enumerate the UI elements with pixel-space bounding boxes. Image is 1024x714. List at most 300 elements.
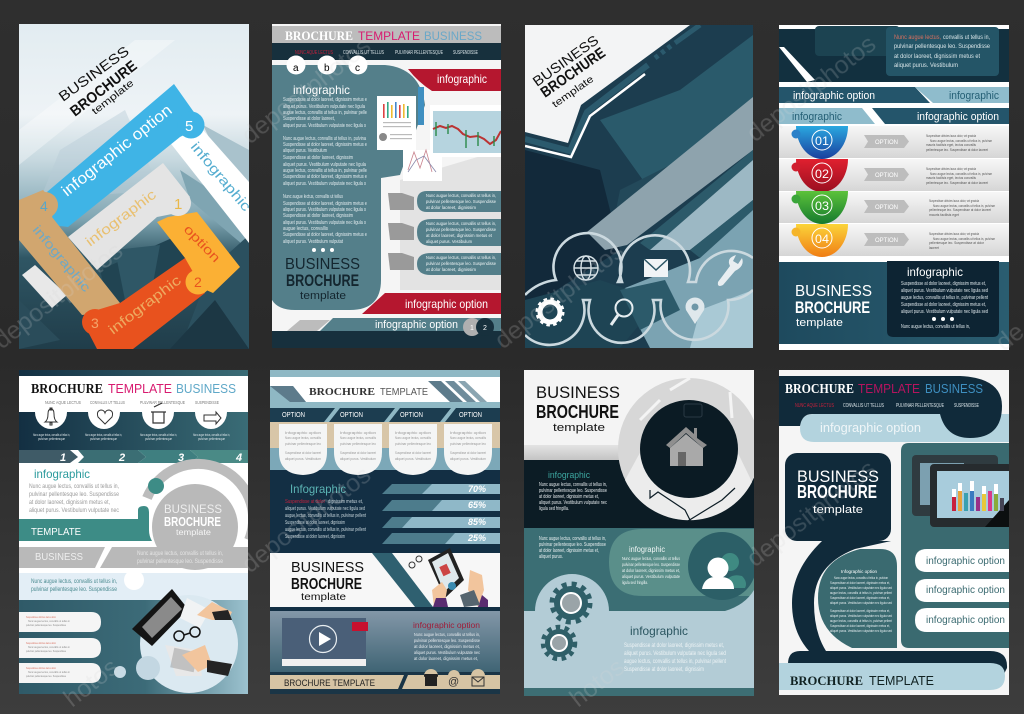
header title and nav: TEMPLATE [108, 381, 172, 396]
option row 03: Suspendisse ultricies lacus dolor, vel gravida [929, 199, 979, 203]
band: yellow option: option [181, 222, 224, 265]
text block: infographic: augue lectus, convallis ut tellus in, pulvinar pellent [285, 513, 366, 519]
footer panel with title and text box: BROCHURE [795, 298, 870, 317]
icon: map pin [686, 297, 704, 324]
dark title box [785, 453, 891, 541]
text block: infographic: dignissim metus et, [328, 499, 363, 505]
text block: infographic on light blue [624, 624, 726, 673]
option cards: aliquet purus. Vestibulum [285, 457, 321, 461]
option row 04: OPTION [875, 238, 898, 244]
folder icons and pills: Nunc augue lectus, convallis ut tellus in, [426, 221, 496, 226]
option cards: Suspendisse at dolor laoreet [395, 451, 431, 455]
option row 03: Nunc augue lectus, convallis ut tellus in, pulvinar [933, 204, 996, 208]
abc tabs: c [355, 63, 360, 74]
panel: brochure 8, tablets and pills [779, 370, 1012, 695]
grey ring with title: BROCHURE [164, 514, 221, 529]
text block [283, 83, 367, 245]
folder icons and pills: pulvinar pellentesque leo. Suspendisse [426, 227, 496, 232]
title: BROCHURE [286, 271, 359, 290]
white title wedge and teal stripes: template [301, 592, 347, 603]
folder icons and pills: at dolor laoreet, dignissim [426, 205, 476, 210]
footer strip: 1 [470, 325, 474, 332]
text block: infographic: pulvinar pellentesque leo. Suspendisse [29, 492, 120, 498]
step chevrons: 1 [60, 452, 66, 464]
option cards: Suspendisse at dolor laoreet [285, 451, 321, 455]
title: BUSINESS [529, 32, 601, 89]
footer pill: TEMPLATE [869, 673, 934, 688]
text block: infographic on light blue: augue lectus, convallis ut tellus in, pulvinar pellent [624, 659, 726, 665]
option cards: aliquet purus. Vestibulum [395, 457, 431, 461]
band: tan infographic: infographic [30, 222, 94, 295]
ribbon row 1 [779, 87, 1009, 103]
text block: augue lectus, convallis [283, 226, 328, 232]
option row 02: 02 [815, 167, 829, 181]
band: orange infographic: 3 [91, 315, 99, 331]
grey business bands: BUSINESS [35, 552, 83, 563]
band: small white strip [22, 265, 67, 308]
option row 02: pellentesque leo. Suspendisse at dolor laoreet [926, 181, 988, 185]
option cards: Nunc augue lectus, convallis [450, 436, 486, 440]
icon: large gear [552, 584, 590, 622]
text block: aliquet purus. Vestibulum vulputate nec ligula s [283, 207, 366, 213]
watermark text: depositphotos [236, 32, 376, 150]
watermark text: depositphotos [741, 455, 881, 573]
text block: infographic: aliquet purus. Vestibulum vulputate nec [29, 508, 119, 514]
dark header with text box: convallis ut tellus in, [943, 34, 990, 41]
option row 01: 01 [815, 134, 829, 148]
folder icons and pills: at dolor laoreet, dignissim metus et [426, 233, 493, 238]
teal inner text shape: aliquet purus. Vestibulum vulputate nec ligula sed [830, 586, 892, 590]
text block: aliquet purus. Vestibulum vulputat [283, 239, 343, 245]
grey business bands: Nunc augue lectus, convallis ut tellus in, [137, 551, 223, 557]
header title and nav: CONVALLIS UT TELLUS [90, 400, 125, 405]
text block: Nunc augue lectus, convallis ut tellus [283, 194, 343, 200]
text block: Suspendisse at dolor laoreet, dignissim metus e [283, 174, 367, 180]
red banner: infographic option: infographic option [405, 297, 488, 311]
option cards: Suspendisse at dolor laoreet [450, 451, 486, 455]
white option pills: infographic option [926, 615, 1005, 626]
illustration: laptop, hands, glasses [114, 589, 238, 693]
dark header with title: BROCHURE [785, 382, 854, 397]
band: blue infographic option [47, 84, 204, 227]
header title and nav: PULVINAR PELLENTESQUE [140, 400, 185, 405]
percent bars: 70% [468, 484, 486, 494]
dark icon band: Nunc augue lectus, convallis ut tellus in, [193, 433, 230, 437]
teal template band: TEMPLATE [31, 527, 81, 538]
abc tabs [286, 56, 368, 74]
dots [312, 248, 334, 252]
text block: infographic: infographic [34, 467, 90, 481]
ribbon row 1: infographic [949, 90, 999, 102]
panel: brochure 6, options and percentages [270, 370, 500, 694]
bottom poly background [19, 600, 248, 694]
header with stripes: TEMPLATE [380, 387, 428, 398]
title: rotated business brochure template: template [90, 78, 137, 117]
header title and nav: SUSPENDISSE [195, 400, 219, 405]
title: BROCHURE [538, 44, 609, 101]
watermark text: hotos [564, 653, 630, 713]
icon: arrow [204, 412, 221, 424]
navigation bar: PULVINAR PELLENTESQUE [395, 50, 443, 56]
watermark text: hotos [58, 653, 124, 713]
option row 03: pellentesque leo. Suspendisse at dolor laoreet [929, 208, 991, 212]
white pills: pulvinar pellentesque leo. Suspendisse [26, 649, 66, 653]
teal section [524, 528, 754, 612]
light pill with user icon: ligula sed fringilla. [622, 580, 648, 585]
navigation bar [272, 43, 501, 60]
footer strip: 2 [483, 325, 487, 332]
video panel: aliquet purus. Vestibulum vulputate nec [414, 650, 481, 655]
text block: aliquet purus. Vestibulum vulputate nec ligula s [283, 123, 366, 129]
white pills [19, 612, 101, 683]
dark icon band [19, 412, 248, 450]
dark title box: BROCHURE [797, 482, 877, 502]
footer strip with contact icons [270, 669, 500, 694]
option row 04: Suspendisse ultricies lacus dolor, vel gravida [929, 232, 979, 236]
ribbon row 1: infographic option [793, 90, 875, 102]
dark title box: template [813, 504, 863, 516]
folder icons and pills [388, 191, 501, 275]
option row 02: Suspendisse ultricies lacus dolor, vel gravida [926, 167, 976, 171]
text block: Suspendisse at dolor laoreet, dignissim metus e [283, 97, 367, 103]
dark header with title [779, 376, 1002, 438]
text block: infographic [29, 467, 120, 514]
option cards: Nunc augue lectus, convallis [340, 436, 376, 440]
arrow ring with home icon [618, 378, 760, 524]
text block: infographic: Suspendisse at dolor laoreet, dignissim [285, 534, 345, 540]
option row 02: Nunc augue lectus, convallis ut tellus in, pulvinar [930, 172, 993, 176]
header title and nav: BROCHURE [31, 382, 103, 397]
text block on black: infographic [548, 470, 590, 480]
icon: envelope [644, 259, 668, 277]
white pills: pulvinar pellentesque leo. Suspendisse [26, 623, 66, 627]
step chevrons: 4 [235, 452, 242, 464]
step chevrons: 3 [178, 452, 184, 464]
footer strip with contact icons: @ [448, 676, 459, 688]
dark header with text box: at dolor laoreet, dignissim metus et [894, 53, 980, 60]
teal inner text shape: aliquet purus. Vestibulum vulputate nec ligula sed [830, 601, 892, 605]
white title wedge and teal stripes: BUSINESS [291, 559, 364, 576]
percent bars [382, 484, 500, 544]
band: tan infographic [19, 190, 120, 315]
option row 03: mauris facilisis eget [929, 213, 959, 217]
text block on black: at dolor laoreet, dignissim metus et, [539, 494, 599, 500]
teal inner text shape: Nunc augue lectus, convallis ut tellus in, pulvinar [834, 576, 889, 580]
watermark text: depositphotos [741, 30, 881, 148]
white option pills: infographic option [926, 585, 1005, 596]
title: template [553, 422, 605, 434]
text block: infographic: at dolor laoreet, dignissim metus et, [29, 500, 110, 506]
footer panel with title and text box: Nunc augue lectus, convallis ut tellus in, [901, 324, 970, 330]
teal inner text shape: Suspendisse at dolor laoreet, dignissim metus et, [830, 581, 890, 585]
dark header with title: PULVINAR PELLENTESQUE [896, 403, 944, 409]
text block: Suspendisse at dolor laoreet, dignissim [283, 155, 353, 161]
option row 04: laoreet [929, 246, 939, 250]
option row 03: OPTION [875, 205, 898, 211]
text block left on teal: at dolor laoreet, dignissim metus et, [539, 548, 599, 554]
header title and nav [31, 381, 236, 405]
dark icon band: pulvinar pellentesque [90, 437, 117, 441]
dark header with title: BUSINESS [925, 381, 983, 396]
option row 04: 04 [815, 232, 829, 246]
band: white infographic: infographic [188, 139, 255, 214]
text block: infographic on light blue: Suspendisse at dolor laoreet, dignissim metus et, [624, 643, 724, 649]
cards row background [270, 422, 500, 470]
text block on black: Nunc augue lectus, convallis ut tellus in, [539, 482, 607, 488]
video panel: Nunc augue lectus, convallis ut tellus in, [414, 632, 480, 637]
video panel: pulvinar pellentesque leo. Suspendisse [414, 638, 480, 643]
text block: augue lectus, convallis ut tellus in, pulvinar pelle [283, 168, 367, 174]
option bar: OPTION [459, 412, 482, 419]
percent bars: 85% [468, 517, 486, 527]
icon: globe [574, 256, 598, 280]
white pills: Suspendisse ultricies lacus dolor [26, 615, 56, 619]
text block on black: ligula sed fringilla. [539, 506, 569, 512]
folder icons and pills: Nunc augue lectus, convallis ut tellus in, [426, 193, 496, 198]
option row 02: OPTION [875, 173, 898, 179]
text block: Nunc augue lectus, convallis ut tellus in, pulvina [283, 136, 366, 142]
band: orange infographic [82, 258, 210, 349]
footer panel with title and text box: BUSINESS [795, 283, 872, 300]
grey ring with title: BUSINESS [164, 502, 222, 516]
option row 04 [779, 224, 1009, 257]
teal inner text shape: Infographic option [841, 569, 877, 574]
header bar with title: TEMPLATE [358, 29, 420, 43]
footer pill [779, 651, 1007, 690]
navigation bar: NUNC AQUE LECTUS [295, 50, 333, 56]
grey business bands [19, 547, 248, 568]
title: template [550, 74, 596, 110]
header bar with title: BROCHURE [285, 28, 353, 43]
option cards [279, 424, 492, 475]
teal inner text shape: aliquet purus. Vestibulum vulputate nec ligula sed [830, 614, 892, 618]
illustration: tablet and hands [409, 548, 488, 607]
text block: infographic [285, 482, 366, 540]
step chevrons [19, 450, 248, 464]
percent bars: 25% [467, 533, 486, 543]
video panel [270, 611, 500, 672]
title [285, 256, 360, 302]
option cards: pulvinar pellentesque leo [395, 442, 431, 446]
option cards: pulvinar pellentesque leo [340, 442, 376, 446]
white pills: Suspendisse ultricies lacus dolor [26, 666, 56, 670]
dark header with title: NUNC AQUE LECTUS [795, 403, 835, 409]
grey ring with title: template [176, 528, 212, 537]
light pill with user icon: infographic [629, 545, 665, 554]
header bar with title [272, 26, 501, 43]
panel: brochure 5, steps and laptop [19, 370, 253, 694]
dark icon band: pulvinar pellentesque [38, 437, 65, 441]
option cards: Nunc augue lectus, convallis [395, 436, 431, 440]
header with stripes [270, 377, 500, 408]
text block: aliquet purus. Vestibulum vulputate nec ligula s [283, 220, 366, 226]
dark header with title: CONVALLIS UT TELLUS [843, 403, 884, 409]
icon: small gear [543, 627, 575, 659]
documents with charts [377, 87, 502, 181]
white pills: Nunc augue lectus, convallis ut tellus in [28, 645, 70, 649]
band: orange infographic: infographic [105, 272, 184, 337]
footer strip with contact icons: BROCHURE TEMPLATE [284, 678, 375, 688]
teal inner text shape: Suspendisse at dolor laoreet, dignissim metus et, [830, 624, 890, 628]
band: yellow option [157, 212, 240, 293]
white title wedge and teal stripes: BROCHURE [291, 576, 362, 593]
footer panel with title and text box: Suspendisse at dolor laoreet, dignissim metus et, [901, 302, 986, 308]
abc tabs: a [293, 63, 299, 74]
text block left on teal: aliquet purus. [539, 554, 563, 560]
panel: brochure 3, icon cover [525, 25, 753, 348]
icon: magnifier [611, 300, 632, 325]
title: BUSINESS [285, 256, 360, 273]
text block: infographic: augue lectus, convallis ut tellus in, pulvinar pellent [285, 527, 366, 533]
option row 03 [779, 191, 1009, 224]
header title and nav: NUNC AQUE LECTUS [45, 400, 81, 405]
option row 02: mauris facilisis eget, lectus convallis [926, 176, 976, 180]
band: blue infographic option: infographic option [59, 102, 176, 200]
title: BROCHURE [536, 402, 619, 422]
band: grey infographic [68, 163, 191, 270]
folder icons and pills: Nunc augue lectus, convallis ut tellus in, [426, 255, 496, 260]
option cards: Suspendisse at dolor laoreet [340, 451, 376, 455]
folder icons and pills: aliquet purus. Vestibulum [426, 239, 472, 244]
footer panel with title and text box: infographic [907, 265, 963, 279]
text block on black: aliquet purus. Vestibulum vulputate nec [539, 500, 607, 506]
icon: gear [537, 299, 563, 325]
grey business bands: pulvinar pellentesque leo. Suspendisse [137, 559, 224, 565]
light blue text band: pulvinar pellentesque leo. Suspendisse [31, 587, 118, 593]
title: BUSINESS [536, 383, 620, 402]
folder icons and pills: pulvinar pellentesque leo. Suspendisse [426, 261, 496, 266]
option row 01: Suspendisse ultricies lacus dolor, vel gravida [926, 134, 976, 138]
dark icon band: pulvinar pellentesque [198, 437, 225, 441]
option row 01: Nunc augue lectus, convallis ut tellus in, pulvinar [930, 139, 993, 143]
option row 02 [779, 159, 1009, 192]
navigation bar: CONVALLIS UT TELLUS [343, 50, 384, 56]
white option pills [915, 549, 1009, 632]
dark title box: BUSINESS [797, 468, 879, 486]
text block left on teal: pulvinar pellentesque leo. Suspendisse [539, 542, 606, 548]
dark icon band: Nunc augue lectus, convallis ut tellus in, [140, 433, 177, 437]
dark header with text box: pulvinar pellentesque leo. Suspendisse [894, 43, 990, 50]
dark icon band: Nunc augue lectus, convallis ut tellus in, [85, 433, 122, 437]
icon: magic hat [151, 403, 166, 423]
option cards: Infographic option [340, 431, 376, 435]
video panel: at dolor laoreet, dignissim metus et, [414, 656, 478, 661]
white pills: Nunc augue lectus, convallis ut tellus in [28, 619, 70, 623]
option row 01: OPTION [875, 140, 898, 146]
watermark text: depositphotos [489, 237, 629, 355]
header with stripes: BROCHURE [309, 386, 375, 398]
title: rotated business brochure template: BROCHURE [67, 58, 141, 120]
light pill with user icon: Nunc augue lectus, convallis ut tellus [622, 556, 681, 561]
text block: infographic: Suspendisse at dolor [285, 499, 325, 505]
text block: infographic on light blue: infographic [630, 624, 688, 638]
light blue text band: Nunc augue lectus, convallis ut tellus in, [31, 579, 117, 585]
band: grey infographic: infographic [82, 186, 159, 249]
light pill with user icon: aliquet purus. Vestibulum vulputate [622, 574, 680, 579]
percent bars: 65% [468, 500, 486, 510]
option row 01: mauris facilisis eget, lectus convallis [926, 143, 976, 147]
light pill with user icon [609, 529, 756, 600]
right teal panel [901, 443, 1009, 648]
text block on black: pulvinar pellentesque leo. Suspendisse [539, 488, 607, 494]
text block: Suspendisse at dolor laoreet, [283, 116, 335, 122]
option cards: aliquet purus. Vestibulum [450, 457, 486, 461]
dark crescent arc [792, 541, 891, 651]
panel: brochure 2, teal blob with charts [272, 24, 502, 348]
band: blue infographic option: 5 [185, 118, 193, 135]
footer strip [272, 318, 501, 348]
option row 03: 03 [815, 199, 829, 213]
text block: Suspendisse at dolor laoreet, dignissim [283, 213, 353, 219]
option cards: Infographic option [285, 431, 321, 435]
text block: infographic: Infographic [290, 482, 346, 496]
white option pills: infographic option [926, 556, 1005, 567]
band: white infographic [171, 130, 249, 243]
grey ring with title [147, 464, 253, 570]
teal inner text shape: aliquet purus. Vestibulum vulputate nec ligula sed [830, 629, 892, 633]
ribbon row 2 [779, 108, 1009, 124]
footer panel with title and text box: aliquet purus. Vestibulum vulputate nec ligula sed [901, 288, 988, 294]
option cards: Nunc augue lectus, convallis [285, 436, 321, 440]
teal template band [19, 506, 152, 541]
dark header with text box: Nunc augue lectus, [894, 34, 941, 41]
text block: infographic: aliquet purus. Vestibulum vulputate nec ligula sed [285, 506, 365, 512]
dark header with title: SUSPENDISSE [954, 403, 979, 409]
light blue text band [19, 570, 248, 600]
text block left on teal [539, 536, 606, 560]
option cards: pulvinar pellentesque leo [285, 442, 321, 446]
icon: wrench [718, 255, 743, 286]
dark header with title: TEMPLATE [858, 381, 920, 396]
text block: infographic on light blue: Suspendisse at dolor laoreet, dignissim [624, 667, 704, 673]
dark header with text box [779, 26, 1009, 82]
tablets with bar chart [912, 455, 1012, 527]
title: template [300, 290, 346, 302]
teal blob panel [272, 65, 425, 310]
watermark text: depositphotos [236, 461, 376, 579]
band: grey infographic: 1 [174, 196, 182, 213]
light pill with user icon: pulvinar pellentesque leo. Suspendisse [622, 562, 680, 567]
light pill with user icon: at dolor laoreet, dignissim metus et, [622, 568, 680, 573]
option bar: OPTION [400, 412, 423, 419]
option row 01 [779, 126, 1009, 159]
white title wedge and teal stripes [270, 553, 500, 607]
option cards: aliquet purus. Vestibulum [340, 457, 376, 461]
teal inner text shape: Suspendisse at dolor laoreet, dignissim metus et, [830, 609, 890, 613]
text block left on teal: Nunc augue lectus, convallis ut tellus in, [539, 536, 606, 542]
option row 01: pellentesque leo. Suspendisse at dolor laoreet [926, 148, 988, 152]
abc tabs: b [324, 63, 330, 74]
text block: infographic: Suspendisse at dolor laoreet, dignissim [285, 520, 345, 526]
folder icons and pills: at dolor laoreet, dignissim [426, 267, 476, 272]
folder icons and pills: pulvinar pellentesque leo. Suspendisse [426, 199, 496, 204]
panel: brochure 7, ring and gears [524, 370, 760, 696]
red banner: infographic [408, 69, 501, 91]
option row 04: Nunc augue lectus, convallis ut tellus in, pulvinar [933, 237, 996, 241]
option bar: OPTION [282, 412, 305, 419]
footer panel with title and text box: template [796, 317, 843, 329]
video panel: at dolor laoreet, dignissim metus et, [414, 644, 480, 649]
band: tan infographic: 4 [40, 198, 48, 214]
option cards: Infographic option [450, 431, 486, 435]
red banner: infographic option [362, 293, 501, 314]
icon: heart [97, 410, 113, 424]
text block: infographic on light blue: aliquet purus. Vestibulum vulputate nec ligula sed [624, 651, 726, 657]
white pills: pulvinar pellentesque leo. Suspendisse [26, 674, 66, 678]
text block: augue lectus, convallis ut tellus in, pulvinar pelle [283, 110, 367, 116]
red banner: infographic: infographic [437, 72, 487, 86]
option bar: OPTION [340, 412, 363, 419]
